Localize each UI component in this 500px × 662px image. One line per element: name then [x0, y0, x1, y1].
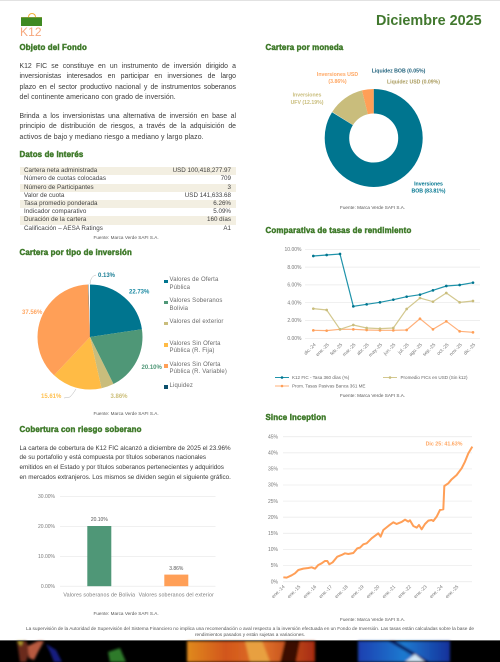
table: datos de interés: 709	[221, 175, 231, 182]
heading: Cartera por tipo de inversión: Cartera por tipo de inversión	[20, 248, 132, 257]
line chart: comparativa de tasas: 2.00%	[287, 318, 302, 324]
pie chart: cartera por tipo de inversión: 37.56%	[22, 310, 43, 316]
disclaimer	[26, 626, 474, 638]
bar chart: cobertura soberana: 0.00%	[41, 584, 56, 590]
line chart: comparativa de tasas: may.-25	[368, 342, 384, 358]
line chart: comparativa de tasas: Promedio FICs en USD (Sin k12)	[400, 375, 468, 380]
legend: tipo de inversión: Pública (R. Fija)	[170, 348, 215, 354]
donut chart: cartera por moneda: Inversiones	[414, 182, 443, 188]
text: objeto del fondo: plazo en el sector productivo nacional y de instrumentos soberanos	[20, 84, 236, 91]
bar chart: cobertura soberana: 20.10%	[91, 517, 108, 523]
line chart: since inception: 10%	[268, 547, 279, 553]
pie chart: cartera por tipo de inversión: 0.13%	[98, 273, 116, 279]
donut chart: cartera por moneda: Inversiones	[293, 92, 322, 98]
text: cobertura: La cartera de cobertura de K12 FIC alcanzó a diciembre de 2025 el 23.96%	[20, 444, 231, 452]
line chart: comparativa de tasas: ene.-25	[315, 342, 331, 358]
line chart: since inception: 25%	[268, 499, 279, 505]
table: datos de interés: USD 100,418,277.97	[173, 167, 231, 174]
line chart: since inception: 5%	[271, 563, 279, 569]
source note: Fuente: Marca Verde SAFI S.A.	[340, 617, 405, 622]
text: objeto del fondo: del continente americano con grado de inversión.	[20, 94, 176, 101]
source note: Fuente: Marca Verde SAFI S.A.	[94, 234, 159, 240]
text: objeto del fondo: K12 FIC se constituye en un instrumento de inversión dirigido a	[20, 62, 236, 70]
source note: Fuente: Marca Verde SAFI S.A.	[94, 411, 159, 416]
line chart: since inception: 20%	[268, 515, 279, 521]
line chart: since inception: 45%	[268, 434, 279, 440]
table: datos de interés	[20, 167, 236, 232]
line chart: comparativa de tasas: nov.-25	[448, 342, 464, 357]
table: datos de interés: 5.09%	[213, 208, 231, 215]
line chart: since inception: Dic 25: 41.63%	[426, 442, 463, 448]
text: objeto del fondo: inversionistas interesados en participar en inversiones de largo	[20, 73, 236, 80]
donut chart: cartera por moneda: Liquidez USD (0.09%)	[387, 80, 440, 86]
disclaimer: rendimientos pasados y están sujetas a variaciones.	[195, 632, 305, 638]
source note: Fuente: Marca Verde SAFI S.A.	[94, 611, 159, 616]
line chart: comparativa de tasas: oct.-25	[436, 342, 451, 357]
bar chart: cobertura soberana: 30.00%	[38, 494, 56, 500]
heading: Objeto del Fondo: Objeto del Fondo	[20, 43, 87, 52]
legend: tipo de inversión: Valores del exterior	[170, 319, 224, 325]
table: datos de interés: Duración de la cartera	[24, 216, 86, 223]
text: cobertura: en mercados extranjeros. Los mismos se dividen según el siguiente gráfico.	[20, 474, 231, 481]
line chart: since inception: 0%	[271, 579, 279, 585]
disclaimer: La supervisión de la Autoridad de Supervisión del Sistema Financiero no implica una recomendación o aval respecto a la inversión efectuada en un Fondo de Inversión. Las tasas están calculadas sobre la base de	[26, 626, 474, 632]
donut chart: cartera por moneda: UFV (12.19%)	[291, 100, 324, 106]
line chart: since inception: 35%	[268, 467, 279, 473]
line chart: since inception: ene.-14	[271, 584, 287, 600]
line chart: comparativa de tasas: feb.-25	[329, 342, 344, 357]
table: datos de interés: USD 141,633.68	[185, 192, 231, 199]
line chart: since inception: ene.-25	[444, 584, 460, 600]
table: datos de interés: 160 días	[207, 216, 231, 223]
line chart: comparativa de tasas: ago.-25	[408, 342, 424, 358]
donut chart: cartera por moneda: Liquidez BOB (0.05%)	[372, 68, 426, 74]
donut chart: cartera por moneda: (3.86%)	[328, 79, 347, 85]
legend: tipo de inversión	[164, 276, 227, 389]
bar chart: cobertura soberana: 20.00%	[38, 524, 56, 530]
text: alternativa de inversión	[20, 112, 236, 141]
pie chart: cartera por tipo de inversión: 22.73%	[129, 290, 150, 296]
table: datos de interés: Número de cuotas colocadas	[24, 175, 106, 182]
line chart: comparativa de tasas: 0.00%	[287, 336, 302, 342]
heading: Cobertura con riesgo soberano: Cobertura con riesgo soberano	[20, 425, 142, 434]
table: datos de interés: 3	[228, 184, 231, 191]
table: datos de interés: Número de Participantes	[24, 184, 94, 191]
heading: Cartera por moneda: Cartera por moneda	[266, 43, 343, 52]
line chart: comparativa de tasas: Prom. Tasas Pasivas Banca 361 ME	[292, 384, 365, 389]
bar chart: cobertura soberana: Valores soberanos del exterior	[139, 592, 214, 598]
text: alternativa de inversión: activos de bajo y mediano riesgo a mediano y largo plazo.	[20, 134, 204, 141]
line chart: since inception: 40%	[268, 450, 279, 456]
text: cobertura: emitidos en el Estado y por títulos soberanos pertenecientes y adquiridos	[20, 464, 224, 471]
pie chart: cartera por tipo de inversión: 15.61%	[41, 394, 62, 400]
title: Diciembre 2025: Diciembre 2025	[376, 13, 482, 29]
table: datos de interés: Indicador comparativo	[24, 208, 86, 215]
bar chart: cobertura soberana: 10.00%	[38, 554, 56, 560]
bar chart: cobertura soberana: 3.86%	[169, 566, 184, 572]
text: alternativa de inversión: principio de distribución de riesgos, a través de la adquisición de	[20, 123, 236, 130]
pie chart: cartera por tipo de inversión: 20.10%	[142, 365, 163, 371]
text: cobertura: de su portafolio y está compuesta por títulos soberanos nacionales	[20, 454, 206, 461]
line chart: comparativa de tasas: 10.00%	[285, 247, 302, 253]
line chart: since inception: ene.-18	[334, 584, 350, 600]
table: datos de interés: 6.26%	[213, 200, 231, 207]
legend: tipo de inversión: Bolivia	[170, 306, 188, 312]
text: alternativa de inversión: Brinda a los inversionistas una alternativa de inversión en base al	[20, 112, 236, 120]
line chart: comparativa de tasas: 6.00%	[287, 283, 302, 289]
logo: K12: K12	[20, 25, 42, 39]
line chart: comparativa de tasas: jul.-25	[396, 342, 411, 356]
line chart: since inception: ene.-21	[381, 584, 397, 600]
line chart: since inception: ene.-22	[397, 584, 413, 600]
legend: tipo de inversión: Valores Soberanos	[170, 298, 222, 304]
legend: tipo de inversión: Valores Sin Oferta	[170, 340, 221, 346]
line chart: comparativa de tasas: sep.-25	[422, 342, 437, 358]
line chart: since inception: ene.-15	[286, 584, 302, 600]
line chart: comparativa de tasas: mar.-25	[342, 342, 358, 358]
line chart: since inception: ene.-24	[429, 584, 445, 600]
line chart: comparativa de tasas: 8.00%	[287, 265, 302, 271]
legend: tipo de inversión: Liquidez	[170, 383, 193, 389]
table: datos de interés: Tasa promedio ponderada	[24, 200, 98, 207]
line chart: comparativa de tasas: dic.-24	[303, 342, 318, 357]
source note: Fuente: Marca Verde SAFI S.A.	[340, 393, 405, 398]
line chart: since inception: ene.-19	[350, 584, 366, 600]
donut chart: cartera por moneda: BOB (83.81%)	[411, 188, 446, 194]
source note: Fuente: Marca Verde SAFI S.A.	[340, 204, 405, 210]
line chart: comparativa de tasas: abr.-25	[356, 342, 371, 357]
line chart: comparativa de tasas: jun.-25	[382, 342, 397, 357]
text: objeto del fondo	[20, 62, 236, 101]
table: datos de interés: Valor de cuota	[24, 192, 64, 199]
line chart: since inception: ene.-16	[302, 584, 318, 600]
legend: tipo de inversión: Valores Sin Oferta	[170, 362, 221, 368]
pie chart: cartera por tipo de inversión: 3.86%	[110, 394, 128, 400]
heading: Datos de interés: Datos de Interés	[20, 150, 83, 158]
table: datos de interés: Calificación – AESA Ratings	[24, 225, 103, 232]
line chart: since inception: ene.-17	[318, 584, 334, 600]
heading: Comparativa de tasas de rendimiento: Comparativa de tasas de rendimiento	[266, 226, 411, 235]
line chart: since inception: ene.-23	[413, 584, 429, 600]
line chart: comparativa de tasas: dic.-25	[463, 342, 477, 357]
donut chart: cartera por moneda: Inversiones USD	[317, 72, 358, 78]
text: cobertura	[20, 444, 231, 481]
line chart: comparativa de tasas: K12 FIC - Tasa 360 días (%)	[292, 375, 350, 380]
line chart: since inception: ene.-20	[365, 584, 381, 600]
table: datos de interés: A1	[223, 225, 231, 232]
heading: Since Inception: Since Inception	[266, 413, 326, 422]
logo: K12	[20, 13, 42, 39]
line chart: since inception: 30%	[268, 483, 279, 489]
legend: tipo de inversión: Pública	[170, 285, 190, 291]
line chart: since inception: 15%	[268, 531, 279, 537]
legend: tipo de inversión: Pública (R. Variable)	[170, 369, 227, 375]
legend: tipo de inversión: Valores de Oferta	[170, 277, 218, 283]
bar chart: cobertura soberana: Valores soberanos de Bolivia	[63, 592, 135, 598]
line chart: comparativa de tasas: 4.00%	[287, 300, 302, 306]
table: datos de interés: Cartera neta administrada	[24, 167, 97, 174]
top edge strip	[0, 0, 500, 1]
